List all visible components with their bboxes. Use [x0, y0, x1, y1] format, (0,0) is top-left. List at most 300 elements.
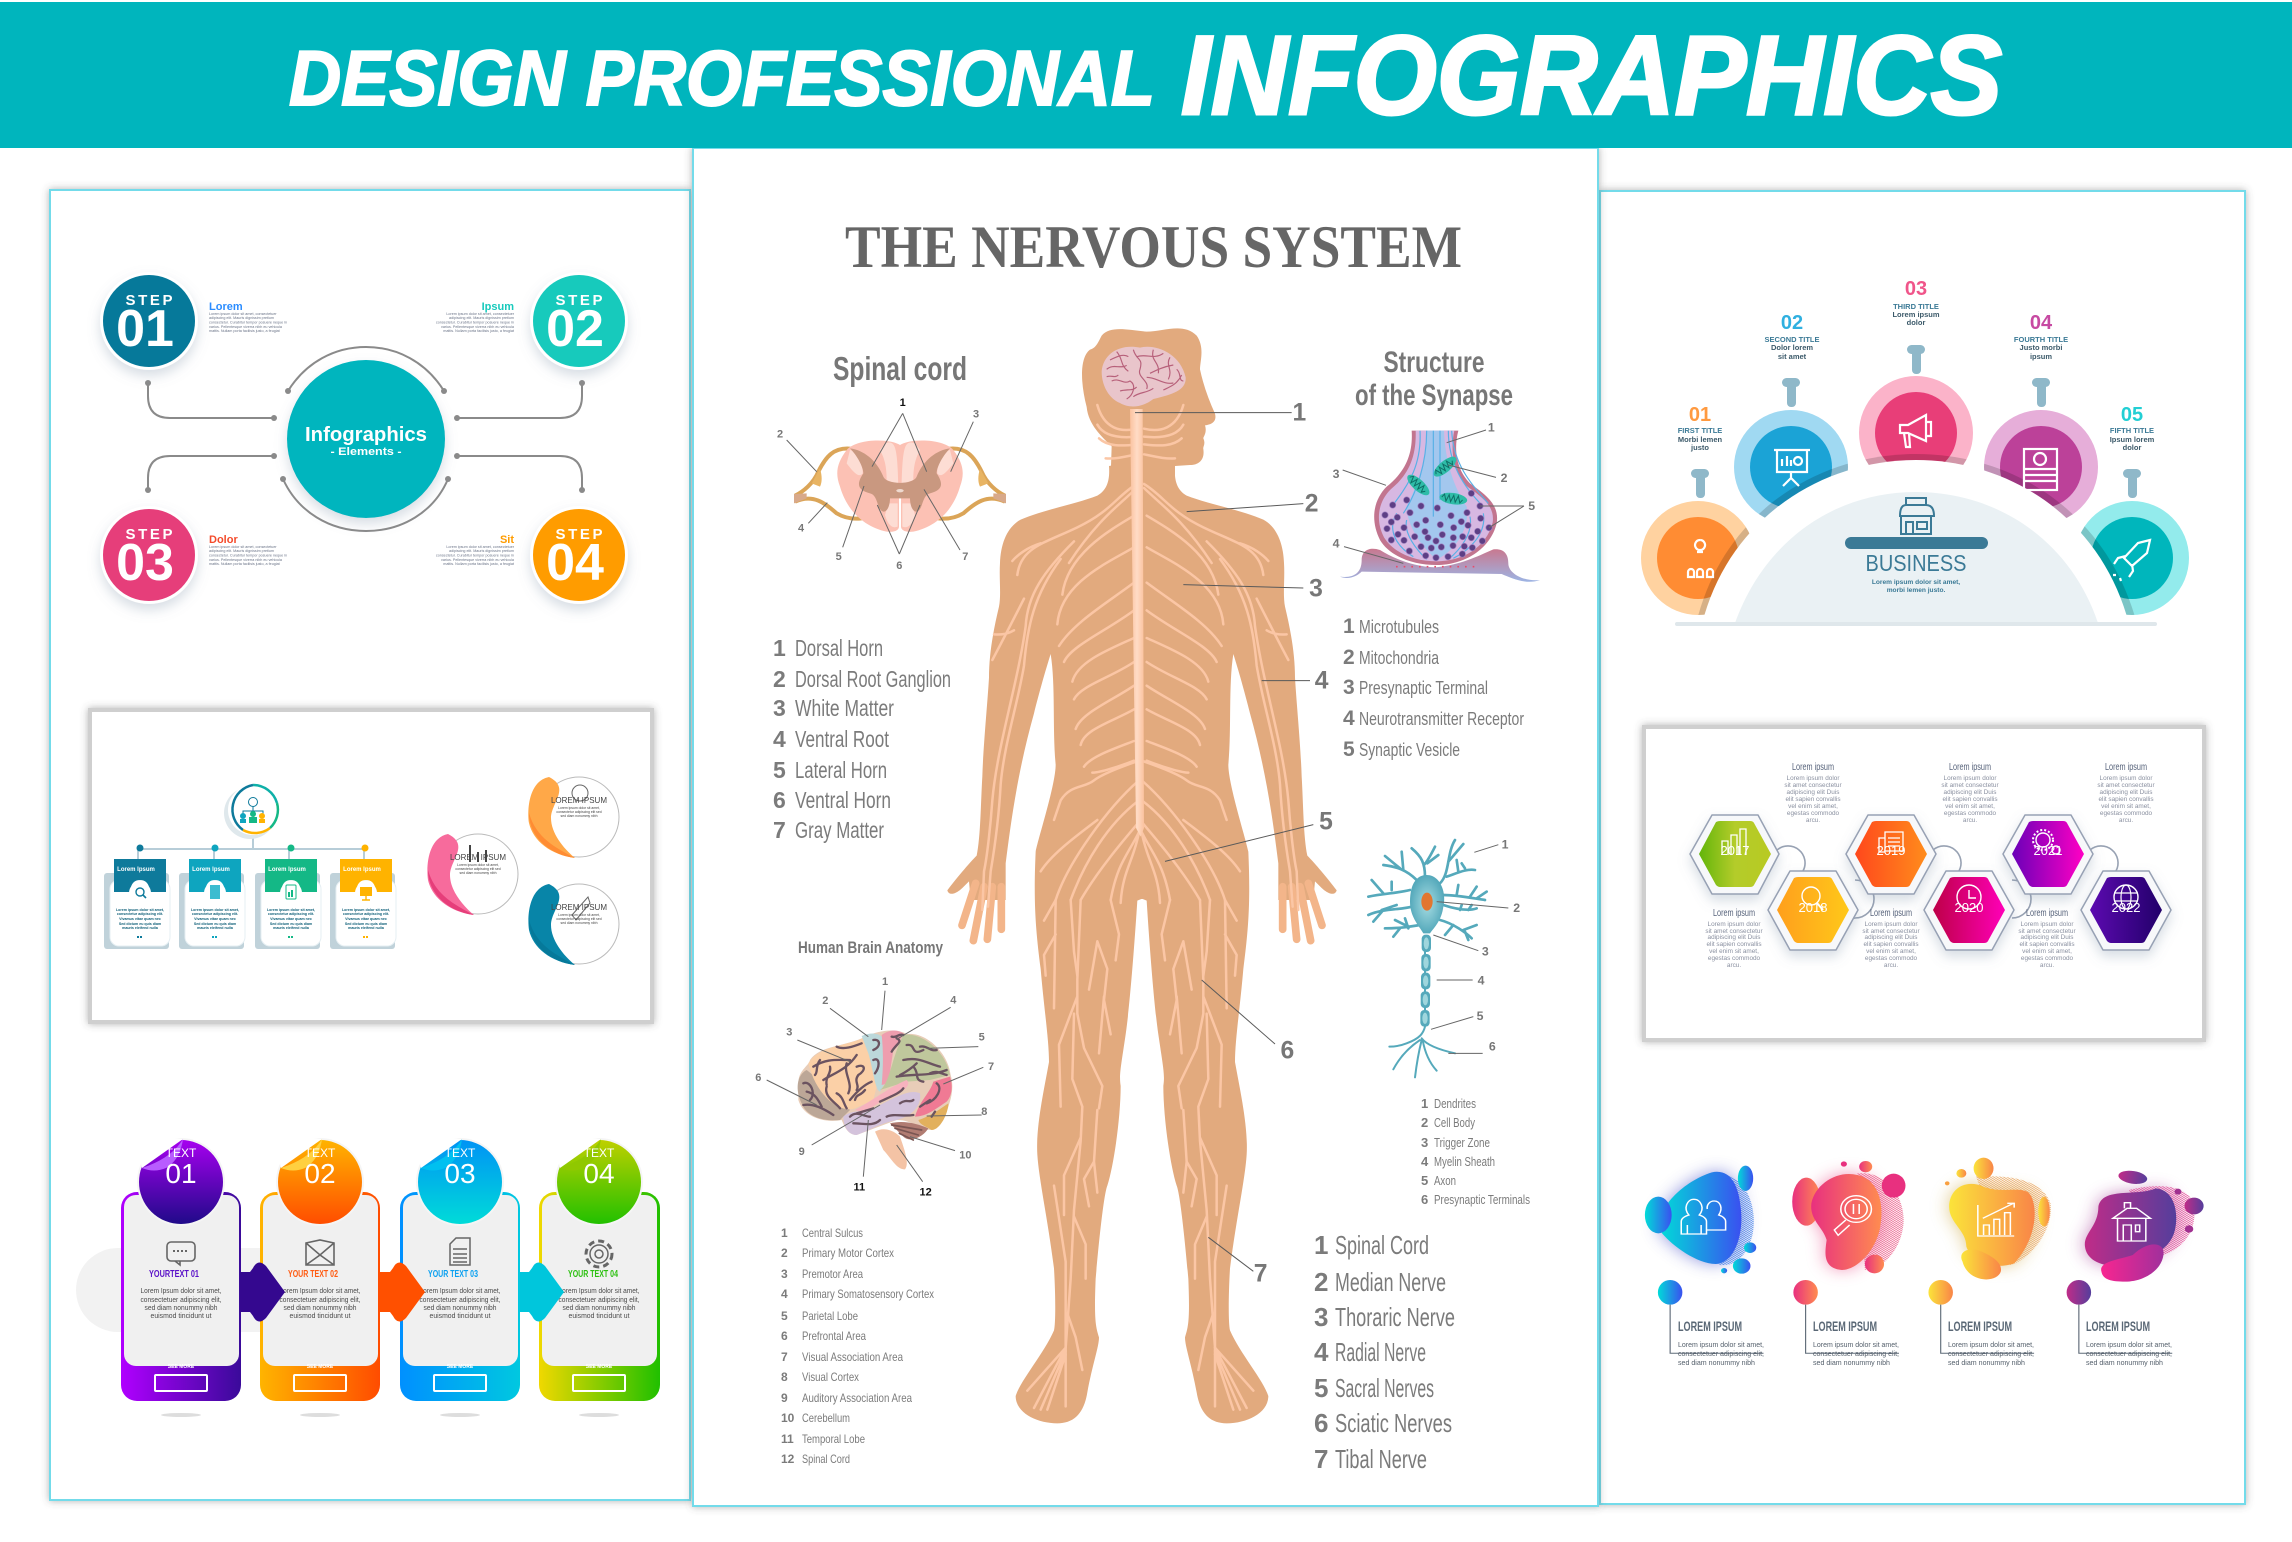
card 01: consectetuer adipiscing elit, — [140, 1295, 222, 1304]
brain lobes — [798, 1030, 952, 1169]
step 04: 04 — [546, 534, 604, 592]
hexagon text top 3: arcu. — [2119, 817, 2133, 824]
card 04: SEE MORE — [586, 1364, 613, 1370]
body nerves list: 5 — [1314, 1373, 1328, 1403]
brain wrinkles — [803, 1035, 947, 1140]
body nerves list: 6 — [1314, 1408, 1328, 1438]
blob 1 blue — [1645, 1166, 1756, 1274]
hexagon 2022 — [2081, 871, 2171, 950]
neuron list: Myelin Sheath — [1434, 1154, 1495, 1169]
org card 1: Vivamus vitae quam nec — [119, 917, 161, 921]
arrows between cards — [240, 1262, 564, 1322]
hexagon text top 1: vel enim sit amet, — [1788, 803, 1838, 810]
central circle: Infographics — [305, 424, 427, 446]
hexagon 2019 — [1846, 815, 1936, 894]
fingers — [962, 883, 1322, 941]
step 02 — [436, 272, 628, 370]
brain anatomy list: Primary Somatosensory Cortex — [802, 1287, 934, 1301]
card 04: euismod tincidunt ut — [568, 1311, 630, 1320]
body label numbers: 2 — [1305, 490, 1319, 517]
card 04: Lorem Ipsum dolor sit amet, — [558, 1286, 640, 1295]
org card 1: consectetur adipiscing elit. — [117, 912, 163, 916]
synapse list: 3 — [1343, 676, 1355, 699]
spinal cord list: Lateral Horn — [795, 757, 887, 783]
body nerves list: 1 — [1314, 1230, 1328, 1260]
header title — [289, 13, 2002, 138]
step 03: consectetur. Curabitur tempor posuere neque in — [209, 554, 287, 558]
synapse list: 2 — [1343, 646, 1355, 669]
hexagon 2017 — [1690, 815, 1779, 894]
step labels: Lorem ipsum — [1892, 310, 1940, 319]
card 01: 01 — [165, 1158, 197, 1189]
hexagon text bottom 3: Lorem ipsum dolor — [2021, 921, 2074, 928]
org card 2 — [179, 859, 245, 949]
connector lines — [145, 347, 585, 531]
spinal cord — [1130, 409, 1144, 837]
body nerves list: 2 — [1314, 1267, 1328, 1297]
brain anatomy list: 2 — [781, 1246, 788, 1260]
nucleus — [1421, 893, 1433, 911]
hexagon text bottom 2: adipiscing elit Duis — [1865, 934, 1917, 941]
card 02 — [260, 1135, 380, 1417]
step 03: varius. Pellentesque viverra nibh eu vehicula — [209, 558, 283, 562]
step labels: SECOND TITLE — [1764, 335, 1820, 344]
hexagon text top 3: Lorem ipsum — [2105, 762, 2147, 773]
blob caption 1 — [1678, 1318, 1764, 1367]
neuron list: 2 — [1421, 1115, 1428, 1130]
panel: right sheet — [1600, 191, 2245, 1504]
card 01: SEE MORE — [168, 1364, 195, 1370]
step 02: Ipsum — [482, 301, 514, 313]
hexagon text bottom 1: arcu. — [1727, 962, 1741, 969]
hexagon timeline frame — [1644, 727, 2204, 1040]
card 01: YOURTEXT 01 — [149, 1269, 199, 1280]
body label numbers: 5 — [1319, 809, 1333, 836]
step 03: STEP — [126, 526, 172, 543]
hexagon text bottom 2: elit sapien convallis — [1863, 941, 1919, 948]
brain numbers: 1 — [882, 976, 888, 988]
spinal cord diagram — [777, 397, 1006, 572]
store icon — [1900, 498, 1934, 534]
step 04: mattis. Nullam porta facilisis justo, a feugiat — [443, 562, 514, 566]
hexagon text top 1 — [1784, 762, 1842, 824]
card 02: consectetuer adipiscing elit, — [280, 1295, 360, 1304]
org card 1: Lorem ipsum dolor sit amet, — [116, 908, 164, 912]
presynaptic bulb — [1374, 431, 1497, 565]
synapse numbers: 3 — [1333, 467, 1340, 481]
brain numbers: 9 — [799, 1146, 805, 1158]
neuron list: 6 — [1421, 1192, 1428, 1207]
card 02: Lorem Ipsum dolor sit amet, — [280, 1286, 360, 1295]
step circles infographic — [100, 272, 628, 604]
header title: INFOGRAPHICS — [1181, 13, 2002, 138]
header banner — [0, 2, 2292, 148]
step labels: FOURTH TITLE — [2014, 335, 2068, 344]
blob caption 4 — [2086, 1318, 2172, 1367]
step labels: dolor — [1907, 318, 1925, 327]
org card 3: mauris eleifend nulla — [273, 926, 310, 930]
step 01 — [100, 272, 287, 370]
hexagon 2018: 2018 — [1799, 900, 1827, 915]
drop circle teal: sed diam nonummy nibh — [561, 921, 598, 925]
step 04: Sit — [500, 534, 514, 546]
brain anatomy list: Visual Cortex — [802, 1370, 859, 1384]
card 04: consectetuer adipiscing elit, — [558, 1295, 640, 1304]
spinal cord list: 3 — [773, 695, 786, 721]
step 01: Lorem ipsum dolor sit amet, consectetuer — [209, 312, 277, 316]
panel: left sheet — [50, 190, 690, 1500]
hexagon text top 1: sit amet consectetur — [1784, 782, 1842, 789]
org card 1: mauris eleifend nulla — [122, 926, 159, 930]
body nerves list: 3 — [1314, 1302, 1328, 1332]
brain anatomy diagram — [755, 976, 994, 1199]
synapse heading — [1355, 346, 1513, 412]
blob bullets — [1658, 1280, 2172, 1353]
card 03: sed diam nonummy nibh — [424, 1303, 496, 1312]
spinal numbers: 3 — [973, 408, 979, 420]
body label numbers — [1254, 400, 1333, 1287]
synapse list: Mitochondria — [1359, 648, 1440, 668]
card 02: SEE MORE — [307, 1364, 334, 1370]
neuron numbers: 1 — [1502, 838, 1509, 852]
blob caption 2: Lorem ipsum dolor sit amet, — [1813, 1340, 1899, 1349]
white matter — [837, 440, 963, 532]
brain anatomy list: Spinal Cord — [802, 1452, 850, 1466]
blob caption 4: consectetuer adipiscing elit, — [2086, 1349, 2172, 1358]
semicircle business infographic — [1641, 278, 2189, 626]
card 02: YOUR TEXT 02 — [288, 1269, 338, 1280]
neuron list: Trigger Zone — [1434, 1135, 1490, 1150]
neuron list — [1421, 1096, 1530, 1207]
neuron numbers: 6 — [1489, 1040, 1496, 1054]
org card 1: Lorem Ipsum — [117, 867, 155, 873]
org chart connector — [138, 835, 365, 860]
hexagon text bottom 1: elit sapien convallis — [1706, 941, 1762, 948]
nerve roots — [795, 448, 1005, 519]
spinal numbers: 6 — [896, 560, 902, 572]
cell body — [1410, 875, 1444, 933]
body nerves list: Median Nerve — [1335, 1267, 1446, 1297]
neuron list: 4 — [1421, 1154, 1429, 1169]
card 03: 03 — [444, 1158, 476, 1189]
neuron numbers: 3 — [1482, 945, 1489, 959]
hexagon text top 2: arcu. — [1963, 817, 1977, 824]
org card 2: consectetur adipiscing elit. — [192, 912, 238, 916]
white dome and shadow edge — [1696, 454, 2137, 624]
hexagon connector arcs — [1777, 846, 2118, 919]
org card 4: Lorem ipsum dolor sit amet, — [342, 908, 390, 912]
brain numbers: 5 — [979, 1032, 985, 1044]
blob caption 3: LOREM IPSUM — [1948, 1318, 2012, 1334]
poster title: THE NERVOUS SYSTEM — [845, 214, 1462, 280]
hexagon text top 1: Lorem ipsum dolor — [1787, 775, 1840, 782]
spinal cord list: 4 — [773, 726, 786, 752]
brain anatomy list: Visual Association Area — [802, 1350, 903, 1364]
blob caption 3 — [1948, 1318, 2034, 1367]
step 01: Lorem — [209, 301, 243, 313]
neuron list: Presynaptic Terminals — [1434, 1192, 1530, 1207]
drop circle teal: consectetur adipiscing elit sed — [556, 917, 602, 921]
synapse heading: of the Synapse — [1355, 379, 1513, 412]
neuron list: Dendrites — [1434, 1096, 1476, 1111]
step labels: justo — [1690, 443, 1709, 452]
panel: center nervous system poster — [693, 148, 1598, 1506]
org card 4 — [330, 859, 396, 949]
step 04: STEP — [556, 526, 602, 543]
brain numbers: 11 — [854, 1182, 865, 1194]
spinal numbers: 4 — [798, 522, 805, 534]
synapse numbers: 1 — [1488, 421, 1495, 435]
hexagon 2017: 2017 — [1721, 843, 1749, 858]
hexagon text top 2: vel enim sit amet, — [1945, 803, 1995, 810]
petal icons — [1688, 415, 2150, 581]
synapse numbers — [1333, 421, 1535, 551]
brain numbers: 8 — [981, 1106, 987, 1118]
synapse list: Synaptic Vesicle — [1359, 740, 1460, 760]
hexagon text top 1: Lorem ipsum — [1792, 762, 1834, 773]
hexagon text bottom 1: adipiscing elit Duis — [1708, 934, 1760, 941]
drop circle pink: consectetur adipiscing elit sed — [455, 867, 501, 871]
pins — [1691, 345, 2141, 498]
body silhouette — [947, 328, 1337, 1423]
brain anatomy list — [781, 1226, 934, 1466]
org card 3: Vivamus vitae quam nec — [270, 917, 312, 921]
brain anatomy list: 1 — [781, 1226, 788, 1240]
hexagon 2022: 2022 — [2112, 900, 2140, 915]
card 04: YOUR TEXT 04 — [568, 1269, 618, 1280]
hexagon text bottom 3: vel enim sit amet, — [2022, 948, 2072, 955]
card 03: YOUR TEXT 03 — [428, 1269, 478, 1280]
hexagon 2021: 2021 — [2034, 843, 2062, 858]
drop circle orange: sed diam nonummy nibh — [561, 814, 598, 818]
body nerves list: Radial Nerve — [1335, 1337, 1426, 1367]
step 01: STEP — [126, 292, 172, 309]
brain numbers — [755, 976, 994, 1199]
neuron numbers: 4 — [1478, 974, 1485, 988]
gray matter — [850, 448, 950, 512]
nerve network left side — [982, 405, 1139, 1410]
body nerves list: Sciatic Nerves — [1335, 1408, 1452, 1438]
hexagon text bottom 1: Lorem ipsum — [1713, 908, 1755, 919]
spinal numbers — [777, 397, 979, 572]
blob caption 3: consectetuer adipiscing elit, — [1948, 1349, 2034, 1358]
hexagon text top 3 — [2097, 762, 2155, 824]
drop circle orange: Lorem ipsum dolor sit amet, — [558, 806, 600, 810]
step 01: varius. Pellentesque viverra nibh eu vehicula — [209, 325, 283, 329]
org chart and drops frame — [90, 710, 652, 1022]
hexagon text top 3: sit amet consectetur — [2097, 782, 2155, 789]
hexagon text top 2: elit sapien convallis — [1942, 796, 1998, 803]
blob 3 yellow — [1945, 1158, 2051, 1279]
header title: DESIGN PROFESSIONAL — [289, 34, 1155, 122]
brain anatomy list: 7 — [781, 1350, 788, 1364]
spinal cord list: Dorsal Horn — [795, 635, 883, 661]
brain anatomy list: Temporal Lobe — [802, 1432, 865, 1446]
business label: morbi lemen justo. — [1887, 587, 1945, 594]
card 03: TEXT — [445, 1146, 476, 1160]
step 03: Dolor — [209, 534, 238, 546]
step labels: 03 — [1905, 278, 1927, 300]
drop circle orange: LOREM IPSUM — [551, 796, 607, 805]
neuron list: 5 — [1421, 1173, 1428, 1188]
brain anatomy heading: Human Brain Anatomy — [798, 938, 943, 957]
org card 2: Lorem ipsum dolor sit amet, — [191, 908, 239, 912]
blob caption 1: sed diam nonummy nibh — [1678, 1358, 1755, 1367]
brain anatomy list: 12 — [781, 1452, 795, 1466]
step labels — [1678, 278, 2155, 452]
step 04: Lorem ipsum dolor sit amet, consectetuer — [446, 545, 515, 549]
org card 3: Sed dictum eu quis diam — [270, 922, 312, 926]
step labels: sit amet — [1778, 352, 1807, 361]
hexagon text bottom 2: Lorem ipsum — [1870, 908, 1912, 919]
blob caption 1: consectetuer adipiscing elit, — [1678, 1349, 1764, 1358]
hexagon text top 2 — [1941, 762, 1999, 824]
card 04 — [539, 1135, 660, 1417]
hexagon text bottom 1: Lorem ipsum dolor — [1708, 921, 1761, 928]
brain numbers: 6 — [755, 1072, 761, 1084]
blob caption 1: Lorem ipsum dolor sit amet, — [1678, 1340, 1764, 1349]
step labels: Ipsum lorem — [2110, 435, 2155, 444]
step labels: ipsum — [2030, 352, 2052, 361]
spinal numbers: 7 — [962, 551, 968, 563]
blob caption 3: Lorem ipsum dolor sit amet, — [1948, 1340, 2034, 1349]
inner dome — [1735, 492, 2098, 623]
spinal cord list: Ventral Root — [795, 726, 889, 752]
spinal cord list: 7 — [773, 817, 786, 843]
central circle — [287, 360, 445, 518]
card 03: euismod tincidunt ut — [430, 1311, 491, 1320]
blob caption 2: LOREM IPSUM — [1813, 1318, 1877, 1334]
step 04 — [436, 506, 628, 604]
nerve network right side — [1142, 405, 1298, 1410]
brain anatomy list: Prefrontal Area — [802, 1329, 866, 1343]
neuron numbers: 5 — [1477, 1009, 1484, 1023]
step labels: 01 — [1689, 404, 1711, 426]
card 04: sed diam nonummy nibh — [562, 1303, 636, 1312]
hexagon text bottom 3: elit sapien convallis — [2019, 941, 2075, 948]
step 03: Lorem ipsum dolor sit amet, consectetuer — [209, 545, 277, 549]
spinal leader lines — [787, 413, 973, 554]
synapse list: 1 — [1343, 615, 1355, 638]
card 01 — [121, 1135, 241, 1417]
neuron list: 1 — [1421, 1096, 1428, 1111]
card 02: sed diam nonummy nibh — [284, 1303, 356, 1312]
org chart dots — [136, 844, 368, 852]
hexagon 2021 — [2003, 815, 2093, 894]
drop circle pink: sed diam nonummy nibh — [460, 871, 497, 875]
hexagon text bottom 1: sit amet consectetur — [1705, 928, 1763, 935]
neuron list: Axon — [1434, 1173, 1456, 1188]
brain numbers: 2 — [822, 995, 828, 1007]
body nerves list: Sacral Nerves — [1335, 1373, 1434, 1403]
spinal cord list: 6 — [773, 787, 786, 813]
body nerves list — [1314, 1230, 1455, 1474]
step 04: adipiscing elit. Mauris dignissim pretium — [449, 549, 514, 553]
hexagon text bottom 2: arcu. — [1884, 962, 1898, 969]
blob caption 2: sed diam nonummy nibh — [1813, 1358, 1890, 1367]
org card 3 — [255, 859, 321, 949]
step 02: consectetur. Curabitur tempor posuere neque in — [436, 320, 514, 324]
body label numbers: 6 — [1280, 1038, 1294, 1065]
blob 2 coral — [1792, 1161, 1905, 1273]
step 01: adipiscing elit. Mauris dignissim pretium — [209, 316, 274, 320]
org card 3: consectetur adipiscing elit. — [268, 912, 314, 916]
card 03: SEE MORE — [447, 1364, 474, 1370]
card 03 — [400, 1135, 520, 1417]
four column cards infographic — [76, 1135, 660, 1417]
business label: BUSINESS — [1866, 550, 1966, 576]
hexagon text bottom 2 — [1862, 908, 1920, 969]
axon — [1420, 935, 1431, 1027]
hexagon text bottom 3 — [2018, 908, 2076, 969]
hexagon text top 1: egestas commodo — [1787, 810, 1840, 817]
step labels: Justo morbi — [2020, 343, 2062, 352]
blob caption 3: sed diam nonummy nibh — [1948, 1358, 2025, 1367]
hexagon text top 1: elit sapien convallis — [1785, 796, 1841, 803]
brain anatomy list: 5 — [781, 1309, 788, 1323]
body label lines — [1135, 413, 1313, 1271]
org card 4: Lorem Ipsum — [343, 867, 381, 873]
hexagon text top 3: elit sapien convallis — [2098, 796, 2154, 803]
business label — [1866, 550, 1966, 594]
blob caption 4: Lorem ipsum dolor sit amet, — [2086, 1340, 2172, 1349]
brain anatomy list: Central Sulcus — [802, 1226, 863, 1240]
synapse heading: Structure — [1384, 346, 1484, 379]
brain anatomy list: 9 — [781, 1391, 788, 1405]
synapse list: Neurotransmitter Receptor — [1359, 709, 1524, 729]
spinal cord list: 5 — [773, 757, 786, 783]
neuron list: Cell Body — [1434, 1115, 1475, 1130]
hexagon text top 2: Lorem ipsum — [1949, 762, 1991, 773]
org chart head circle — [224, 785, 278, 839]
hexagon text top 2: Lorem ipsum dolor — [1944, 775, 1997, 782]
hexagon text bottom 3: arcu. — [2040, 962, 2054, 969]
step labels: Dolor lorem — [1771, 343, 1813, 352]
body nerves list: Thoraric Nerve — [1335, 1302, 1455, 1332]
step 04: consectetur. Curabitur tempor posuere neque in — [436, 554, 514, 558]
hexagon 2018 — [1768, 871, 1858, 950]
body nerves list: Tibal Nerve — [1335, 1444, 1427, 1474]
drop circle pink — [427, 834, 518, 915]
spinal numbers: 1 — [900, 397, 906, 409]
step 02: Lorem ipsum dolor sit amet, consectetuer — [446, 312, 515, 316]
business label: Lorem ipsum dolor sit amet, — [1872, 579, 1960, 586]
org card 2: Vivamus vitae quam nec — [194, 917, 236, 921]
blob caption 4: LOREM IPSUM — [2086, 1318, 2150, 1334]
hexagon text bottom 2: Lorem ipsum dolor — [1865, 921, 1918, 928]
card 02: TEXT — [305, 1146, 336, 1160]
postsynaptic membrane — [1340, 549, 1540, 582]
body nerves list: 7 — [1314, 1444, 1328, 1474]
synaptic vesicles — [1382, 490, 1492, 561]
org card 3: Lorem Ipsum — [268, 867, 306, 873]
step 02: mattis. Nullam porta facilisis justo, a feugiat — [443, 329, 514, 333]
card 04: 04 — [583, 1158, 615, 1189]
neuron diagram — [1368, 838, 1520, 1077]
synapse diagram — [1333, 421, 1540, 582]
blob caption 1: LOREM IPSUM — [1678, 1318, 1742, 1334]
card 03: consectetuer adipiscing elit, — [420, 1295, 500, 1304]
body nerves list: Spinal Cord — [1335, 1230, 1429, 1260]
brain in head — [1102, 347, 1186, 406]
human body figure — [947, 328, 1337, 1423]
spinal cord list: 2 — [773, 666, 786, 692]
hexagon text top 1: adipiscing elit Duis — [1787, 789, 1839, 796]
brain numbers: 12 — [920, 1187, 932, 1199]
step labels: THIRD TITLE — [1893, 302, 1939, 311]
org card 4: consectetur adipiscing elit. — [343, 912, 389, 916]
step 02: 02 — [546, 300, 604, 358]
